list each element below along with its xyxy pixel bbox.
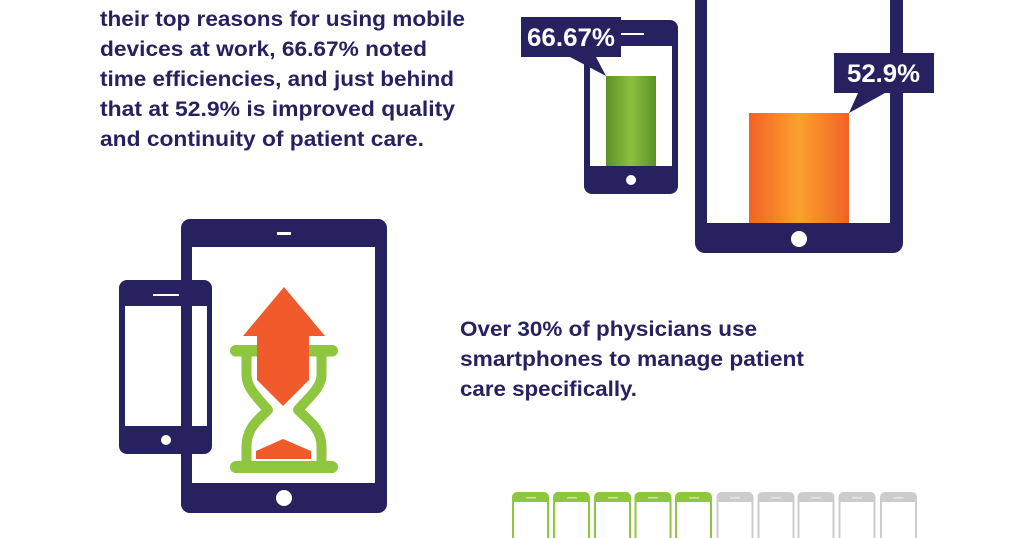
text block: physicians: smartphones to manage patient [460, 348, 804, 371]
text block: physicians: care specifically. [460, 378, 637, 401]
icon: hourglass [230, 345, 338, 473]
bar: green 66.67% [606, 76, 656, 166]
text block: top reasons: devices at work, 66.67% noted [100, 38, 427, 61]
tablet [181, 219, 387, 513]
text block: top reasons: their top reasons for using mobile [100, 8, 465, 31]
text block: physicians [460, 318, 804, 401]
arrow: up [243, 287, 325, 406]
callout: 66.67% [521, 17, 621, 76]
tablet chart: 52.9% [695, 0, 934, 253]
text block: top reasons: that at 52.9% is improved quality [100, 98, 455, 121]
bar: orange 52.9% [749, 113, 849, 223]
icon row: ten phones [512, 492, 917, 538]
icon: tablet and phone with hourglass [119, 219, 387, 513]
text block: top reasons: and continuity of patient care. [100, 128, 424, 151]
text block: physicians: Over 30% of physicians use [460, 318, 757, 341]
callout: 52.9%: 52.9% [847, 60, 920, 88]
phone [119, 280, 212, 454]
callout: 66.67%: 66.67% [527, 24, 615, 52]
phone chart: 66.67% [521, 17, 678, 194]
text block: top reasons: time efficiencies, and just behind [100, 68, 454, 91]
callout: 52.9% [834, 53, 934, 113]
text block: top reasons [100, 8, 465, 151]
